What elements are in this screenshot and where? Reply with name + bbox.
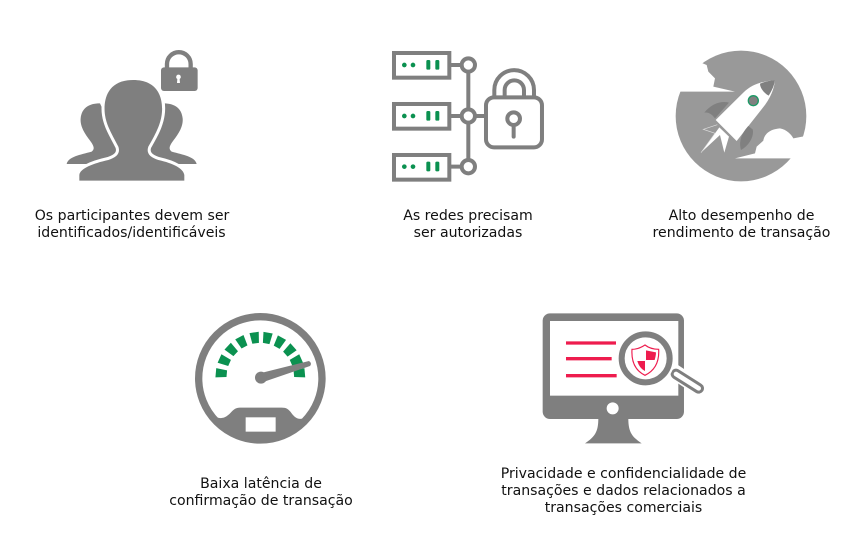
- text: privacy caption: transações comerciais: [545, 500, 702, 516]
- text: low latency caption: confirmação de transação: [169, 493, 353, 509]
- text: privacy caption: Privacidade e confidencialidade de: [501, 466, 746, 482]
- text: high throughput caption: rendimento de transação: [653, 225, 830, 241]
- panel: identified participants: [35, 52, 229, 241]
- panel: low latency: [169, 317, 353, 509]
- text: low latency caption: [169, 476, 353, 509]
- text: authorized networks caption: [403, 208, 533, 241]
- text: high throughput caption: Alto desempenho de: [669, 208, 814, 224]
- panel: high throughput: [653, 47, 830, 241]
- text: low latency caption: Baixa latência de: [200, 476, 322, 492]
- icon: rocket over circle: [672, 47, 812, 181]
- panel: authorized networks: [394, 53, 542, 241]
- text: identified participants caption: [35, 208, 229, 241]
- icon: group of people with padlock: [67, 52, 198, 181]
- text: identified participants caption: Os participantes devem ser: [35, 208, 229, 224]
- text: authorized networks caption: As redes precisam: [403, 208, 533, 224]
- text: privacy caption: transações e dados relacionados a: [501, 483, 746, 499]
- text: privacy caption: [501, 466, 746, 516]
- text: identified participants caption: identificados/identificáveis: [37, 225, 226, 241]
- icon: monitor with magnifier and shield: [543, 313, 699, 443]
- icon: speedometer gauge: [199, 317, 322, 448]
- panel: privacy and confidentiality: [501, 313, 746, 516]
- icon: servers connected to padlock: [394, 53, 542, 180]
- text: high throughput caption: [653, 208, 830, 241]
- text: authorized networks caption: ser autorizadas: [414, 225, 522, 241]
